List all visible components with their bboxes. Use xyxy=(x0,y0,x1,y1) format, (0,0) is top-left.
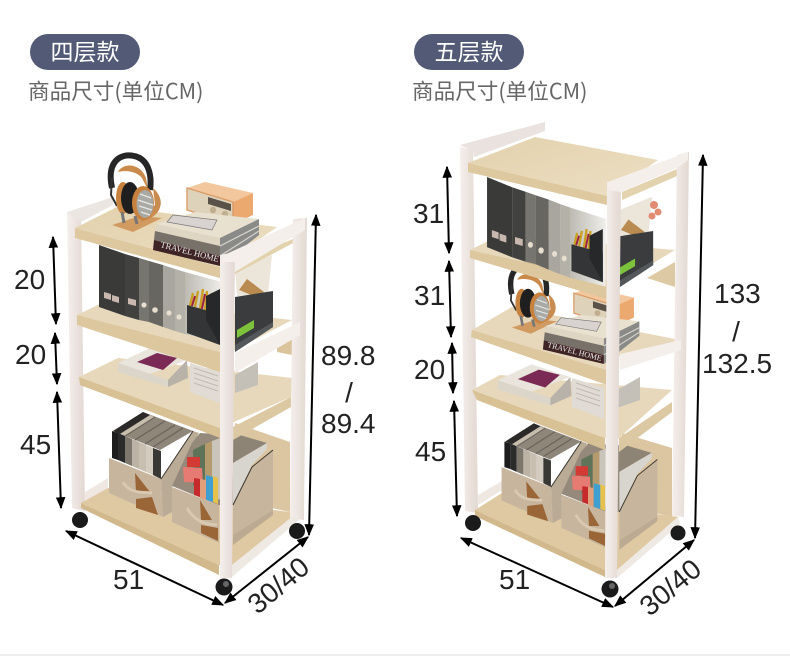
book stack: TRAVEL HOME xyxy=(159,239,220,264)
four tier dimension labels: 45 xyxy=(20,429,51,460)
badge: four tier xyxy=(30,33,140,70)
badge: five tier: 五层款 xyxy=(434,33,504,67)
caster wheels xyxy=(465,515,686,598)
four tier dimension labels: / xyxy=(345,377,353,408)
five tier dimension labels: 45 xyxy=(415,436,446,467)
book stack xyxy=(543,315,639,364)
second shelf xyxy=(77,300,292,372)
five tier dimension arrows xyxy=(447,155,703,607)
book stack xyxy=(153,212,259,266)
magazine book xyxy=(118,348,188,387)
five tier dimension labels: 20 xyxy=(414,354,445,385)
four tier dimension labels: 51 xyxy=(113,564,144,595)
top front rail xyxy=(608,152,688,192)
rear left post xyxy=(67,212,85,511)
rear rail xyxy=(67,197,113,222)
headphones xyxy=(111,155,162,232)
bottom rear rail xyxy=(85,478,108,503)
five tier dimension labels xyxy=(413,198,772,622)
third shelf xyxy=(471,307,680,385)
bottom shelf xyxy=(475,493,678,570)
bottom rear rail xyxy=(478,481,502,505)
back panel xyxy=(622,433,672,517)
four tier dimension labels: 20 xyxy=(14,264,45,295)
radio xyxy=(574,288,634,326)
middle rail xyxy=(620,340,681,370)
paper stand xyxy=(572,377,640,419)
top shelf xyxy=(468,137,677,205)
five tier dimension labels: / xyxy=(732,316,740,347)
five tier dimension labels: 133 xyxy=(714,278,761,309)
rear right post xyxy=(672,152,689,517)
front post xyxy=(605,180,621,578)
five tier dimension labels: 132.5 xyxy=(702,348,772,379)
four tier dimension arrows xyxy=(53,215,316,605)
flowers xyxy=(648,201,662,220)
radio xyxy=(187,182,253,224)
five tier dimension labels: 30/40 xyxy=(634,553,707,622)
pencil box xyxy=(187,255,273,352)
four tier dimension labels: 89.8 xyxy=(321,340,376,371)
lower middle rail xyxy=(232,513,299,577)
caster wheels xyxy=(72,512,305,596)
book stack: TRAVEL HOME xyxy=(546,340,603,363)
top shelf xyxy=(75,207,295,278)
top front rail xyxy=(222,218,305,272)
paper stand xyxy=(190,362,258,404)
fourth shelf xyxy=(472,375,672,452)
rear left post xyxy=(460,147,478,513)
bottom shelf xyxy=(81,488,297,565)
front post xyxy=(220,252,235,578)
magazine book xyxy=(498,364,571,405)
five tier dimension labels: 31 xyxy=(414,280,445,311)
five tier dimension labels: 51 xyxy=(499,564,530,595)
back panel xyxy=(235,423,290,512)
caption: five tier size unit: 商品尺寸(单位CM) xyxy=(412,75,587,106)
storage bins xyxy=(109,412,273,545)
middle rail xyxy=(235,322,300,373)
badge: four tier: 四层款 xyxy=(50,33,120,67)
five tier shelf unit xyxy=(460,122,689,598)
four tier dimension labels: 30/40 xyxy=(242,551,315,620)
storage bins xyxy=(502,423,657,550)
four tier dimension labels: 89.4 xyxy=(321,408,376,439)
rear right post xyxy=(290,218,307,520)
second shelf xyxy=(470,235,675,299)
binders xyxy=(487,177,606,287)
five tier dimension labels: 31 xyxy=(413,198,444,229)
binders xyxy=(99,245,222,342)
headphones xyxy=(511,265,557,334)
caption: four tier size unit: 商品尺寸(单位CM) xyxy=(28,75,203,106)
third shelf xyxy=(79,358,292,440)
four tier shelf unit xyxy=(67,155,307,596)
badge: five tier xyxy=(414,33,524,70)
four tier dimension labels xyxy=(14,264,376,620)
bottom side rail xyxy=(617,517,680,578)
pencil box xyxy=(571,197,653,289)
four tier dimension labels: 20 xyxy=(15,339,46,370)
rear rail xyxy=(460,122,545,157)
